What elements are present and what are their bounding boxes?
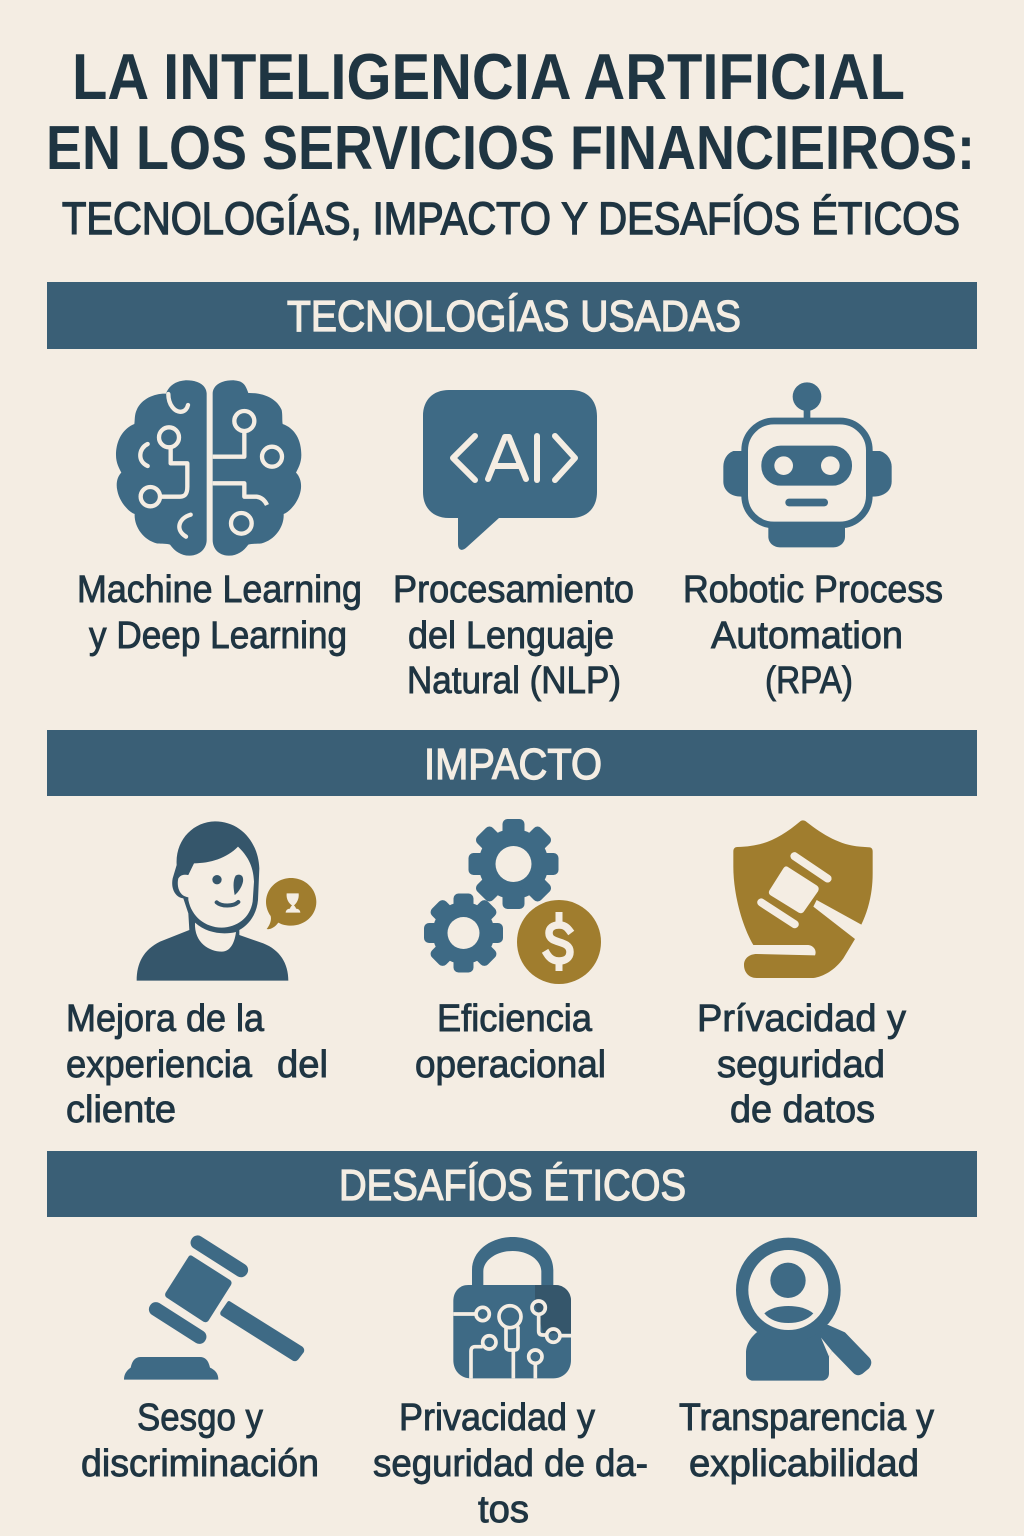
label: sesgo y discriminación: discriminación	[81, 1443, 319, 1485]
label: machine learning: Machine Learning	[77, 569, 362, 611]
icon: customer with speech bubble	[137, 821, 316, 981]
gear small	[424, 894, 503, 972]
section header: impacto	[47, 730, 977, 796]
label: privacidad y seguridad de datos: Prívacidad y	[697, 998, 906, 1040]
section header: desafíos éticos: DESAFÍOS ÉTICOS	[339, 1161, 686, 1210]
label: nlp: del Lenguaje	[408, 615, 614, 657]
label: mejora de la experiencia: cliente	[66, 1089, 176, 1131]
icon: robot	[723, 382, 892, 547]
label: privacidad y seguridad de datos	[373, 1397, 648, 1531]
label: eficiencia operacional	[415, 998, 606, 1086]
icon: padlock with circuit	[453, 1237, 571, 1378]
label: rpa	[683, 569, 943, 702]
label: privacidad y seguridad de datos: seguridad	[717, 1044, 885, 1086]
title	[46, 40, 975, 244]
label: transparencia y explicabilidad: explicabilidad	[689, 1443, 919, 1485]
coin	[517, 900, 601, 984]
icon: magnifier with person	[742, 1244, 871, 1381]
label: mejora de la experiencia: del	[277, 1044, 328, 1086]
label: machine learning	[77, 569, 362, 657]
label: privacidad y seguridad de datos	[697, 998, 906, 1131]
label: privacidad y seguridad de datos: de datos	[730, 1089, 875, 1131]
label: privacidad y seguridad de datos: tos	[478, 1489, 529, 1531]
label: rpa: Robotic Process	[683, 569, 943, 611]
label: nlp: Procesamiento	[393, 569, 634, 611]
label: nlp: Natural (NLP)	[407, 660, 621, 702]
icon: brain circuit	[116, 380, 301, 556]
label: mejora de la experiencia: experiencia	[66, 1044, 253, 1086]
icon: gavel	[124, 1233, 304, 1380]
label: nlp	[393, 569, 634, 702]
section header: tecnologías usadas	[47, 282, 977, 349]
label: mejora de la experiencia	[66, 998, 328, 1131]
icon: gears and coin	[424, 819, 601, 984]
label: sesgo y discriminación: Sesgo y	[137, 1397, 263, 1439]
icon: shield with gavel	[733, 820, 873, 978]
icon: AI speech bubble	[423, 390, 597, 550]
label: sesgo y discriminación	[81, 1397, 319, 1485]
section header: desafíos éticos	[47, 1151, 977, 1217]
section header: tecnologías usadas: TECNOLOGÍAS USADAS	[287, 292, 741, 341]
label: privacidad y seguridad de datos: Privacidad y	[399, 1397, 595, 1439]
label: eficiencia operacional: operacional	[415, 1044, 606, 1086]
label: rpa: (RPA)	[765, 660, 853, 702]
title: LA INTELIGENCIA ARTIFICIAL	[72, 40, 905, 113]
label: privacidad y seguridad de datos: seguridad de da-	[373, 1443, 648, 1485]
gear large	[468, 819, 558, 909]
section header: impacto: IMPACTO	[424, 740, 602, 789]
label: machine learning: y Deep Learning	[89, 615, 347, 657]
label: transparencia y explicabilidad: Transparencia y	[679, 1397, 934, 1439]
label: transparencia y explicabilidad	[679, 1397, 934, 1485]
label: mejora de la experiencia: Mejora de la	[66, 998, 265, 1040]
label: eficiencia operacional: Eficiencia	[437, 998, 593, 1040]
label: rpa: Automation	[711, 615, 903, 657]
